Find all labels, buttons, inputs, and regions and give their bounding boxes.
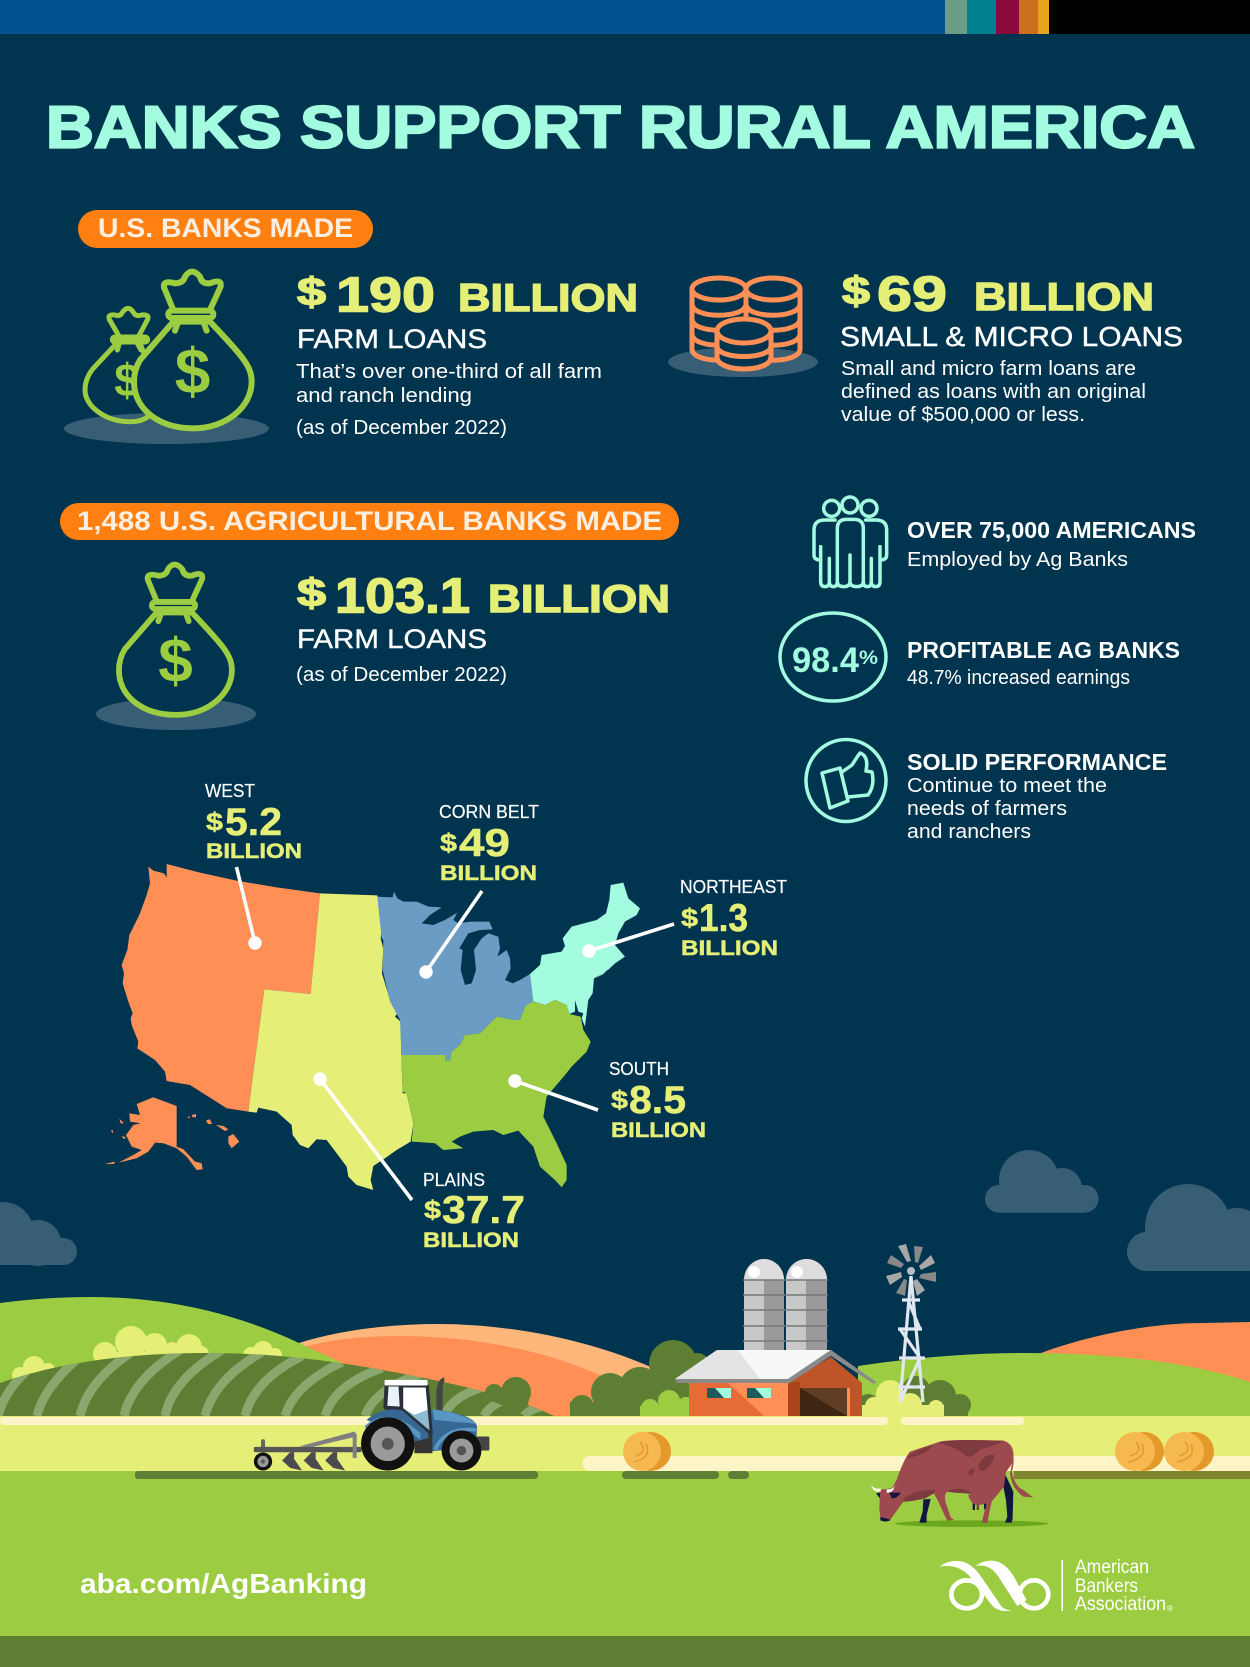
icon: money bag: $: [158, 627, 193, 696]
region: corn belt: [377, 892, 533, 1061]
stat: employed by ag banks: [907, 517, 1196, 571]
stat: $69 billion small and micro loans: [840, 268, 1183, 426]
stat: $103.1 billion farm loans: $: [297, 572, 326, 615]
region: alaska and hawaii: [105, 1097, 239, 1170]
hay bales: [623, 1432, 1214, 1471]
callout: south: SOUTH: [609, 1059, 669, 1079]
pill: U.S. banks made: [78, 210, 373, 248]
stat: $190 billion farm loans: That’s over one-third of all farm: [296, 361, 602, 383]
stat: $103.1 billion farm loans: 103.1: [335, 570, 470, 624]
stat: profitable ag banks: 48.7% increased earnings: [907, 667, 1130, 689]
icon: two money bags: $: [114, 354, 140, 406]
callout: south: [508, 1059, 706, 1142]
barn: [675, 1350, 876, 1416]
callout: northeast: BILLION: [681, 936, 778, 960]
map of United States by region: [105, 864, 640, 1190]
footer link: aba.com/AgBanking: [80, 1568, 367, 1599]
stat: solid performance: needs of farmers: [907, 798, 1067, 820]
icon: money bag: [96, 564, 256, 730]
callout: west: $: [206, 808, 223, 836]
stat: $69 billion small and micro loans: $: [842, 270, 870, 313]
callout: plains: 37.7: [442, 1189, 525, 1232]
icon: two money bags: $: [175, 335, 210, 407]
callout: corn belt: [419, 802, 539, 979]
clouds: [0, 1150, 1250, 1271]
icon: 98.4 percent badge: [780, 613, 886, 701]
stat: $190 billion farm loans: $: [297, 271, 326, 314]
stat: $103.1 billion farm loans: BILLION: [488, 578, 670, 621]
stat: $69 billion small and micro loans: 69: [877, 268, 947, 322]
stat: $103.1 billion farm loans: (as of December 2022): [296, 664, 507, 686]
callout: west: [205, 781, 302, 950]
windmill: [886, 1244, 936, 1402]
callout: northeast: NORTHEAST: [680, 877, 787, 897]
callout: northeast: [582, 877, 787, 960]
callout: plains: $: [424, 1196, 441, 1224]
stat: solid performance: SOLID PERFORMANCE: [907, 749, 1167, 775]
region: south: [401, 1000, 591, 1187]
icon: 98.4 percent badge: 98.4: [792, 641, 860, 680]
callout: south: 8.5: [629, 1079, 686, 1122]
region: west: [122, 864, 320, 1112]
stat: $190 billion farm loans: (as of December 2022): [296, 417, 507, 439]
title: BANKS SUPPORT RURAL AMERICA: [46, 94, 1195, 160]
stat: $103.1 billion farm loans: FARM LOANS: [297, 624, 487, 654]
callout: west: WEST: [205, 781, 255, 801]
icon: 98.4 percent badge: %: [859, 648, 878, 669]
callout: corn belt: CORN BELT: [439, 802, 539, 822]
bushes: [485, 1340, 971, 1419]
callout: south: $: [611, 1086, 628, 1114]
callout: plains: [313, 1072, 525, 1252]
icon: thumbs up: [806, 740, 886, 822]
icon: coin stacks: [668, 278, 818, 377]
region: plains: [248, 893, 413, 1190]
stat: $190 billion farm loans: and ranch lending: [296, 385, 472, 407]
striped field: [0, 1353, 554, 1416]
icon: people: [814, 497, 887, 587]
stat: $190 billion farm loans: [296, 268, 638, 439]
callout: west: 5.2: [225, 801, 282, 844]
stat: employed by ag banks: OVER 75,000 AMERICANS: [907, 517, 1196, 543]
callout: west: BILLION: [206, 839, 302, 863]
stat: $69 billion small and micro loans: Small and micro farm loans are: [841, 358, 1136, 380]
callout: northeast: 1.3: [699, 897, 748, 940]
American Bankers Association logo: Bankers: [1075, 1576, 1138, 1597]
stat: $103.1 billion farm loans: [296, 570, 670, 686]
callout: corn belt: $: [440, 829, 457, 857]
American Bankers Association logo: American: [1075, 1557, 1149, 1578]
pill: U.S. banks made: U.S. BANKS MADE: [98, 213, 353, 243]
callout: northeast: $: [681, 904, 698, 932]
pill: 1,488 agricultural banks made: 1,488 U.S. AGRICULTURAL BANKS MADE: [77, 506, 662, 536]
stat: profitable ag banks: PROFITABLE AG BANKS: [907, 637, 1180, 663]
yellow bushes on far hill: [12, 1326, 282, 1386]
region: northeast: [530, 883, 640, 1027]
stat: solid performance: and ranchers: [907, 821, 1031, 843]
callout: corn belt: BILLION: [440, 861, 537, 885]
landscape hills: [0, 1297, 1250, 1416]
callout: plains: BILLION: [423, 1228, 519, 1252]
stat: $69 billion small and micro loans: defined as loans with an original: [841, 381, 1146, 403]
callout: corn belt: 49: [459, 822, 510, 865]
tractor and plow: [254, 1378, 489, 1471]
top colour bar: [0, 0, 1250, 34]
cow: [871, 1440, 1048, 1527]
stat: $69 billion small and micro loans: BILLION: [974, 276, 1154, 319]
stat: solid performance: Continue to meet the: [907, 775, 1107, 797]
stat: profitable ag banks: [907, 637, 1180, 689]
stat: $69 billion small and micro loans: SMALL & MICRO LOANS: [840, 321, 1183, 352]
stat: $190 billion farm loans: BILLION: [458, 277, 638, 320]
American Bankers Association logo: ®: [1167, 1604, 1173, 1613]
stat: $190 billion farm loans: FARM LOANS: [297, 324, 487, 354]
stat: $69 billion small and micro loans: value of $500,000 or less.: [841, 404, 1085, 426]
road and field: [0, 1416, 1250, 1667]
silos: [743, 1259, 828, 1352]
American Bankers Association logo: [939, 1557, 1173, 1615]
stat: solid performance: [907, 749, 1167, 843]
stat: employed by ag banks: Employed by Ag Banks: [907, 549, 1128, 571]
icon: two money bags: [64, 272, 269, 444]
American Bankers Association logo: Association: [1075, 1594, 1166, 1615]
stat: $190 billion farm loans: 190: [336, 268, 435, 322]
callout: south: BILLION: [611, 1118, 706, 1142]
callout: plains: PLAINS: [423, 1170, 485, 1190]
